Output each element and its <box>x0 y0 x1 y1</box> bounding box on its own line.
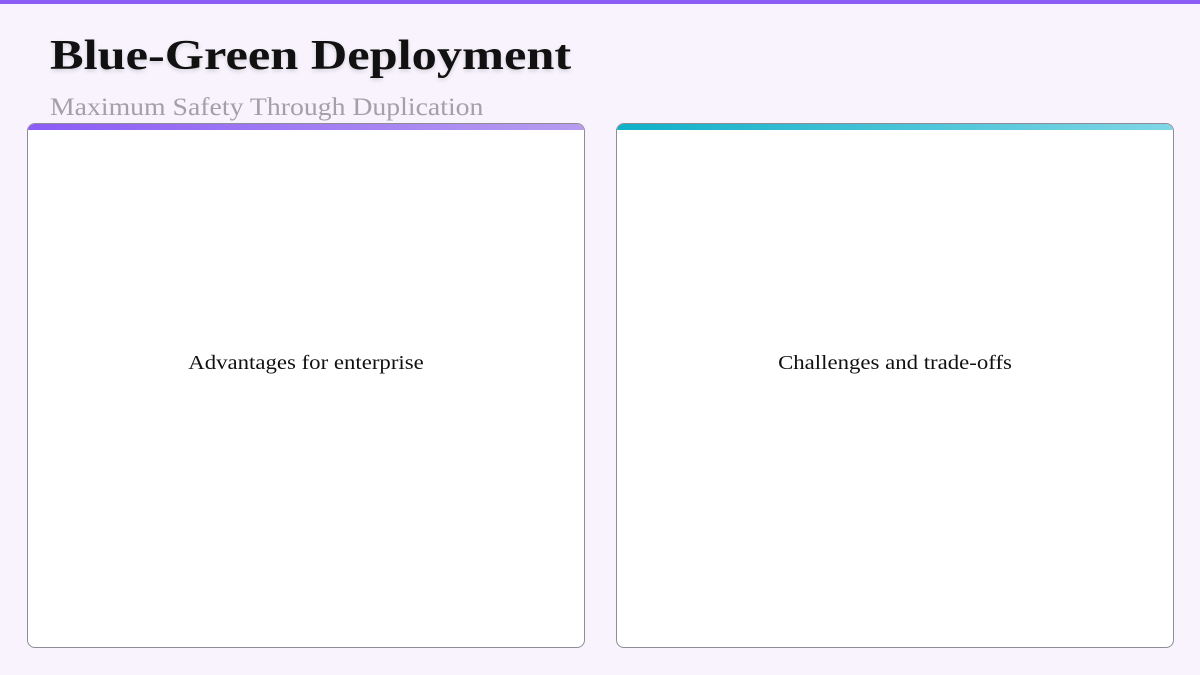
panel label: advantages: Advantages for enterprise <box>188 352 424 374</box>
panel accent bar: purple <box>28 124 584 130</box>
panel: challenges <box>616 123 1174 648</box>
title: Blue-Green Deployment <box>50 33 571 79</box>
panel accent bar: teal <box>617 124 1173 130</box>
panel label: challenges: Challenges and trade-offs <box>778 352 1012 374</box>
subtitle: Maximum Safety Through Duplication <box>50 94 483 121</box>
panel: advantages <box>27 123 585 648</box>
top accent bar <box>0 0 1200 4</box>
